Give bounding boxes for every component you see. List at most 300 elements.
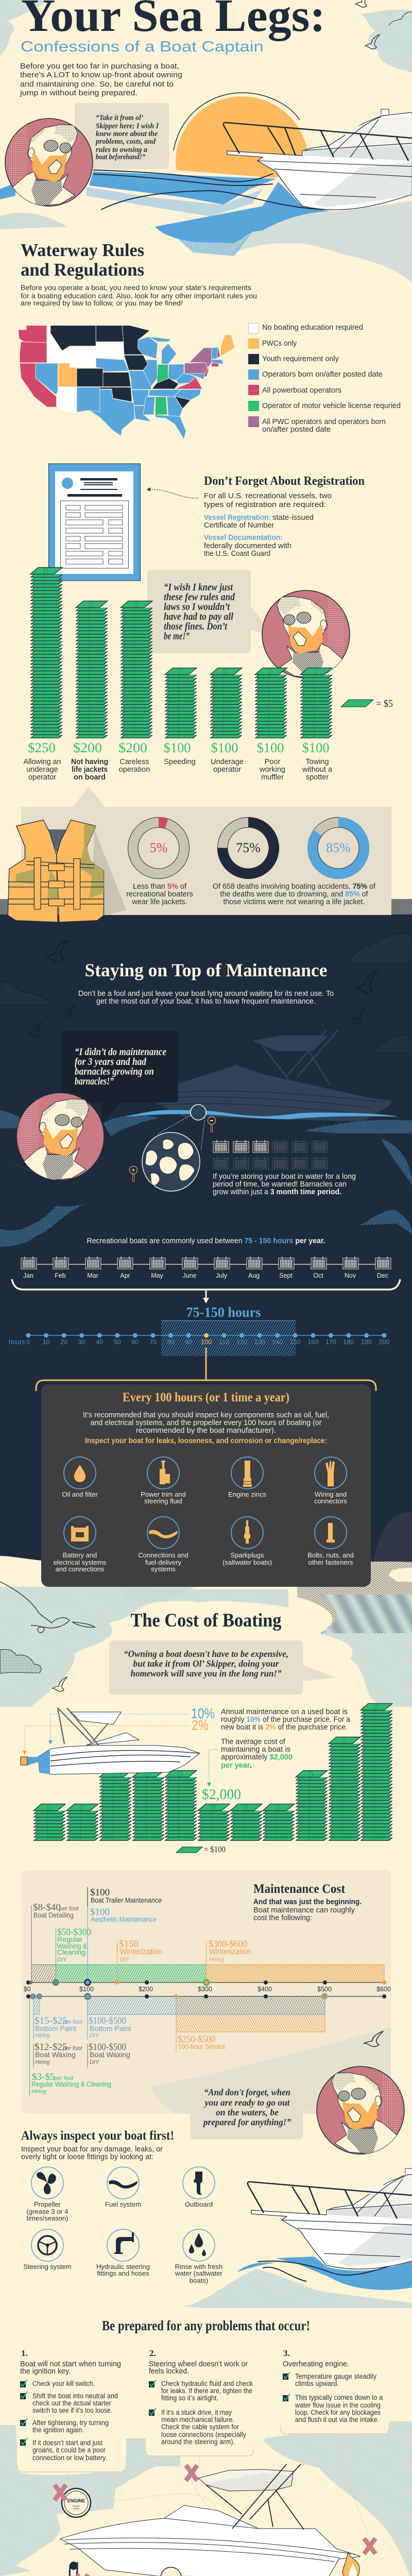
donut captions: Less than 5% of — [133, 883, 187, 891]
prepared quote: prepared for anything!” — [202, 2117, 291, 2127]
problem 3 — [281, 2348, 389, 2434]
barnacle quote: “I didn’t do maintenance — [75, 1046, 166, 1058]
inspection labels: Bolts, nuts, and — [307, 1551, 354, 1559]
donut: 75 percent — [217, 817, 279, 879]
panel: hero — [0, 0, 412, 283]
hours number line: 100 — [201, 1338, 212, 1346]
range labels above axis: Washing & — [57, 1942, 88, 1950]
fine amounts: $100 — [302, 740, 330, 755]
problem 2: 2. — [149, 2348, 156, 2358]
maintenance cost text: cost the following: — [253, 1914, 312, 1922]
range labels above axis: Winterization — [120, 1947, 162, 1956]
skipper portrait mirrored — [262, 590, 350, 678]
range labels above axis: Hiring — [209, 1957, 225, 1963]
hours number line: hours: — [9, 1338, 27, 1346]
range labels above axis: Aesthetic Maintenance — [91, 1915, 157, 1923]
inspection labels: Wiring and — [315, 1490, 347, 1498]
cost quote: homework will save you in the long run!” — [131, 1668, 281, 1679]
donut: 75 percent: 75% — [236, 840, 261, 855]
problem 2: for leaks. If there are, tighten the — [161, 2387, 252, 2395]
map legend: All PWC operators and operators born — [262, 418, 386, 426]
2000 dollars figure: $2,000 — [202, 1786, 241, 1803]
range labels above axis: $100 — [90, 1887, 110, 1898]
range labels above axis: DIY — [57, 1957, 67, 1963]
percent figures: 10% — [191, 1705, 215, 1721]
percent figures — [191, 1705, 215, 1733]
fine labels: on board — [74, 773, 106, 782]
quote text: boat beforehand!” — [96, 153, 146, 161]
heading: cost of boating: The Cost of Boating — [131, 1610, 282, 1631]
white boat — [21, 1708, 200, 1774]
fines speech bubble — [147, 570, 274, 653]
fines quote: laws so I wouldn’t — [164, 601, 230, 613]
problem 2: Check the cable system for — [161, 2423, 239, 2431]
hours number line: 190 — [361, 1338, 372, 1346]
inspection icon labels: Rinse with fresh — [175, 2263, 222, 2270]
fine labels: spotter — [306, 773, 329, 782]
fine amounts: $250 — [28, 740, 56, 755]
axis labels: $0 — [24, 1986, 31, 1993]
timeline: months — [21, 1257, 391, 1279]
donut captions: Of 658 deaths involving boating accidents, 75% of — [213, 883, 376, 891]
seagull — [53, 1677, 67, 1691]
skipper portrait mirrored — [317, 2066, 404, 2154]
problem 3: water flow issue in the cooling — [295, 2401, 381, 2409]
icon: battery — [71, 1526, 89, 1541]
problem 1: the ignition key. — [20, 2367, 71, 2376]
range labels above axis: $50-$300 — [57, 1927, 91, 1938]
prepared quote: on the waters, be — [216, 2107, 279, 2117]
timeline: months: Apr — [120, 1272, 130, 1279]
range labels above axis: Regular — [57, 1935, 82, 1943]
range labels below axis: Hiring — [35, 2059, 50, 2065]
donut captions: the deaths were due to drowning, and 85% of — [220, 890, 368, 899]
line-art boat — [60, 2464, 360, 2576]
inspection icons — [64, 1457, 347, 1549]
maintenance intro — [78, 990, 334, 1006]
fine labels: Underage — [211, 758, 244, 766]
barnacle text: grow within just a 3 month time period. — [213, 1188, 341, 1196]
night waves hatch — [0, 1110, 412, 1247]
problem 3: loop. Check for any blockages — [295, 2409, 381, 2416]
lobe hatch — [170, 232, 252, 256]
rules text: are required by law to follow, or you may be fined! — [21, 299, 183, 307]
hours number line: 90 — [185, 1338, 192, 1346]
registration text: Vessel Registration: — [204, 514, 271, 522]
donut: 5 percent — [128, 817, 190, 879]
heading: maintenance: Staying on Top of Maintenance — [84, 960, 328, 980]
fine labels: Allowing an — [24, 758, 61, 766]
problem 1: Shift the boat into neutral and — [32, 2392, 118, 2400]
engine start button — [62, 2488, 91, 2517]
blue wave band — [89, 172, 276, 205]
engine start button: START — [73, 2505, 80, 2507]
hours number line: 70 — [149, 1338, 157, 1346]
range labels below axis: Bottom Paint — [90, 2024, 131, 2032]
hours number line: 30 — [78, 1338, 85, 1346]
cost speech bubble — [109, 1640, 336, 1694]
fines quote: these few rules and — [164, 591, 235, 603]
boat inspection icons — [31, 2167, 215, 2261]
dark section background — [0, 899, 412, 1563]
usage text: Recreational boats are commonly used between 75 - 150 hours per year. — [87, 1237, 325, 1245]
blue wave lobe — [155, 182, 330, 243]
inspection icon labels: boats) — [190, 2277, 208, 2284]
problem 3: This typically comes down to a — [295, 2394, 383, 2401]
cost text: new boat it is 2% of the purchase price. — [221, 1723, 348, 1732]
waves hatch left — [0, 213, 67, 229]
fine labels: Speeding — [164, 758, 196, 766]
inspection labels: Power trim and — [141, 1490, 186, 1498]
range labels above axis: per foot — [59, 1906, 79, 1912]
maintenance intro: Don’t be a fool and just leave your boat lying around waiting for its next use. To — [78, 990, 334, 998]
heading: every 100 hours: Every 100 hours (or 1 time a year) — [123, 1391, 289, 1404]
problem 2: Check hydraulic fluid and check — [161, 2380, 253, 2387]
night gulls — [46, 940, 68, 962]
range labels below axis: DIY — [90, 2059, 99, 2065]
registration text: the U.S. Coast Guard — [204, 550, 270, 558]
range labels above axis: Winterization — [209, 1947, 251, 1956]
icon: fuel line — [149, 1530, 178, 1538]
icon: engine zinc — [243, 1461, 252, 1487]
prepared speech bubble — [191, 2078, 334, 2139]
donut captions: wear life jackets. — [131, 898, 187, 906]
hours number line: 180 — [343, 1338, 354, 1346]
range labels below axis: per foot — [62, 2019, 82, 2025]
second white boat — [248, 2168, 412, 2269]
night clouds — [0, 934, 412, 1054]
range labels below axis: Regular Washing & Cleaning — [31, 2080, 111, 2088]
hours number line: 200 — [379, 1338, 389, 1346]
donut: 85 percent — [308, 817, 369, 879]
heading: waterway rules: Waterway Rules — [21, 240, 144, 260]
heading: waterway rules — [21, 240, 144, 280]
hours number line: 60 — [131, 1338, 139, 1346]
icon: flame — [342, 2552, 359, 2576]
range labels below axis: $15-$25 — [35, 2015, 67, 2026]
heading: registration: Don’t Forget About Registration — [204, 474, 365, 488]
chart: fines money stacks — [30, 568, 332, 738]
timeline: months: Feb — [55, 1272, 66, 1279]
problem 1: Boat will not start when turning — [20, 2360, 121, 2368]
cost quote: “Owning a boat doesn't have to be expensive, — [124, 1649, 288, 1659]
problem 1: If it doesn’t start and just — [32, 2439, 102, 2447]
quote text: Skipper here; I wish I — [96, 122, 159, 130]
range labels below axis: $100-$500 — [89, 2015, 126, 2026]
dark boat — [142, 1030, 391, 1122]
light wave band — [87, 187, 263, 216]
problem x mark 2 — [186, 2465, 197, 2481]
panel: maintenance cost — [22, 1870, 391, 2114]
prepared quote — [202, 2087, 291, 2127]
hours number line: 20 — [60, 1338, 67, 1346]
inspection labels: connectors — [314, 1497, 347, 1505]
quote text: rules to owning a — [96, 146, 147, 154]
axis labels: $400 — [258, 1986, 272, 1993]
registration text — [204, 492, 332, 558]
map legend: No boating education required — [262, 324, 363, 332]
fine labels: working — [259, 766, 285, 774]
icon: steering wheel — [38, 2236, 57, 2255]
map legend — [248, 324, 401, 434]
icon: bolt — [327, 1523, 335, 1543]
intro text: jump in without being prepared. — [20, 89, 138, 97]
inspection labels: Oil and filter — [62, 1490, 98, 1498]
hours number line: 0 — [27, 1338, 30, 1346]
range labels below axis: $3-$5 — [32, 2072, 55, 2082]
problem 1: Check your kill switch. — [32, 2380, 95, 2387]
barnacle text — [213, 1173, 356, 1196]
inspection labels: Engine zincs — [228, 1490, 266, 1498]
fine labels: operator — [213, 766, 241, 774]
rules text — [21, 283, 257, 307]
registration text: types of registration are required: — [204, 501, 326, 509]
range labels below axis: Bottom Paint — [35, 2024, 76, 2032]
inspection labels: Connections and — [138, 1551, 188, 1559]
inspect text: Inspect your boat for any damage, leaks, or — [21, 2145, 163, 2154]
maintenance bubble — [62, 1031, 178, 1122]
registration text: Vessel Documentation: — [204, 534, 283, 542]
problem x mark 4 — [77, 2574, 88, 2576]
timeline: months: Jan — [23, 1272, 33, 1279]
prepared quote: “And don't forget, when — [204, 2087, 290, 2097]
inspection labels: Battery and — [63, 1551, 97, 1559]
map legend: on/after posted date — [262, 426, 331, 434]
icon: life jacket — [8, 820, 126, 922]
donut: 85 percent: 85% — [326, 840, 351, 855]
sun — [176, 96, 308, 178]
cloud line — [389, 12, 412, 26]
intro text — [20, 62, 182, 97]
problem 1: groans, it could be a poor — [32, 2446, 106, 2454]
fines quote: be me!” — [164, 631, 190, 642]
inspection labels: systems — [151, 1565, 176, 1573]
range labels above axis: $8-$40 — [33, 1902, 61, 1913]
lower sage wave — [231, 201, 412, 283]
problem 2: feels locked. — [149, 2367, 189, 2376]
donut captions: recreational boaters — [126, 890, 193, 899]
fine amounts: $100 — [211, 740, 238, 755]
problem 2: If it’s a stuck drive, it may — [161, 2409, 232, 2416]
problem 1: 1. — [21, 2348, 28, 2358]
sky hatch right — [360, 10, 412, 72]
problem 2: Steering wheel doesn’t work or — [149, 2360, 248, 2368]
icon: power trim — [160, 1461, 170, 1484]
inspection labels: fuel-delivery — [145, 1558, 182, 1566]
sky hatch left — [0, 0, 52, 56]
barnacle magnifier — [130, 1105, 215, 1191]
seagull — [365, 35, 380, 49]
cost text — [221, 1708, 351, 1770]
fines quote: have had to pay all — [164, 611, 233, 622]
every 100 hours text — [83, 1411, 329, 1445]
donut captions: those victims were not wearing a life jacket. — [224, 898, 365, 906]
problem 2: fitting so it’s airtight. — [161, 2394, 218, 2402]
range labels above axis: Boat Trailer Maintenance — [91, 1896, 162, 1904]
timeline: months: Dec — [377, 1272, 388, 1279]
cost quote: but take it from Ol’ Skipper, doing your — [133, 1658, 279, 1669]
barnacle quote: for 3 years and had — [75, 1056, 147, 1067]
maintenance cost text — [253, 1898, 362, 1922]
rules text: Before you operate a boat, you need to know your state’s requirements — [21, 283, 251, 292]
chart: maintenance ranges — [26, 1887, 386, 2095]
quote text: knew more about the — [96, 130, 158, 138]
left blue band — [0, 183, 15, 199]
range labels below axis: per foot — [54, 2075, 74, 2081]
problem 1: connection or low battery. — [32, 2454, 107, 2462]
barnacle quote: barnacles growing on — [75, 1066, 154, 1077]
inspection labels: electrical systems — [54, 1558, 107, 1566]
brace and arrow — [12, 1279, 400, 1303]
inspection icon labels: (grease 3 or 4 — [27, 2208, 68, 2215]
night gull 4 — [350, 1010, 365, 1024]
dotted callout lines — [25, 1714, 218, 1783]
quote text: “Take it from ol’ — [96, 114, 143, 122]
inspection icon labels — [23, 2200, 223, 2284]
seagull top — [355, 0, 370, 7]
night gull 5 — [28, 1023, 43, 1037]
map legend: Operator of motor vehicle license requried — [262, 402, 401, 410]
problem 1: the ignition again. — [32, 2426, 84, 2434]
prepared quote: you are ready to go out — [204, 2097, 290, 2108]
fines quote — [164, 582, 235, 642]
fines quote: “I wish I knew just — [164, 582, 233, 593]
axis labels: $300 — [198, 1986, 212, 1993]
problem 2: mean mechanical failure. — [161, 2416, 234, 2424]
legend: note equals 100 dollars — [176, 1844, 226, 1854]
fine labels: Not having — [71, 758, 108, 766]
hatch behind problem section — [0, 2421, 412, 2576]
barnacle text: If you’re storing your boat in water for a long — [213, 1173, 356, 1181]
every 100 hours text: It’s recommended that you should inspect key components such as oil, fuel, — [83, 1411, 329, 1419]
range labels below axis: Boat Waxing — [90, 2050, 130, 2059]
night gull 2 — [355, 971, 377, 993]
timeline: months: Mar — [87, 1272, 98, 1279]
range labels above axis: Cleaning — [57, 1948, 85, 1956]
heading: waterway rules: and Regulations — [21, 260, 144, 280]
cost text: approximately $2,000 — [221, 1753, 293, 1761]
timeline: months: Aug — [248, 1272, 260, 1279]
fine labels: Poor — [265, 758, 280, 766]
range labels below axis: $250-$500 — [178, 2034, 215, 2045]
sun arc — [174, 93, 300, 150]
donut: 5 percent: 5% — [150, 840, 167, 855]
range labels above axis: $100 — [90, 1907, 110, 1918]
range labels below axis: Boat Waxing — [35, 2050, 76, 2059]
engine start button: ENGINE — [67, 2498, 85, 2503]
icon: oil drop — [74, 1465, 85, 1482]
range labels below axis: DIY — [90, 2032, 99, 2039]
hours number line: 150 — [290, 1338, 301, 1346]
cost text: maintaining a boat is — [221, 1745, 290, 1754]
hours number line: 140 — [272, 1338, 283, 1346]
fine labels: Towing — [305, 758, 329, 766]
inspection icon labels: Outboard — [185, 2200, 213, 2208]
problem 1 — [17, 2348, 126, 2472]
cost text: The average cost of — [221, 1738, 286, 1746]
fine amounts: $200 — [118, 740, 147, 755]
range labels below axis: Hiring — [31, 2089, 47, 2095]
problem 1: check out the actual starter — [32, 2399, 111, 2407]
waves under second boat — [184, 2257, 412, 2308]
registration text: state-issued — [272, 514, 314, 522]
rules text: for a boating education card. Also, look for any other important rules you — [21, 292, 257, 300]
fine labels: muffler — [261, 773, 284, 782]
fine labels: operation — [119, 766, 150, 774]
icon: spark plug — [244, 1520, 250, 1544]
percent figures: 2% — [192, 1717, 209, 1733]
problem x mark 1 — [55, 2485, 66, 2500]
skipper portrait night — [16, 1093, 104, 1180]
dotted connectors — [67, 2434, 370, 2576]
range labels below axis: $100-$500 — [89, 2042, 126, 2053]
problem 1: After tightening, try turning — [32, 2419, 109, 2427]
registration text: Certificate of Number — [204, 521, 274, 530]
icon: outboard — [194, 2172, 202, 2195]
inspection icon labels: Hydraulic steering — [96, 2263, 150, 2270]
hours number line: 10 — [43, 1338, 50, 1346]
inspection icon labels: times/season) — [27, 2214, 68, 2222]
calendars: three months of growth — [213, 1140, 328, 1169]
icon: propeller — [37, 2172, 56, 2194]
range labels below axis: $12-$25 — [35, 2042, 67, 2053]
registration text: federally documented with — [204, 542, 291, 550]
donut captions — [126, 883, 376, 906]
heading: be prepared: Be prepared for any problems that occur! — [102, 2318, 310, 2333]
fine labels — [24, 758, 333, 782]
night gull 3 — [62, 1005, 76, 1019]
range labels below axis — [31, 2015, 226, 2095]
range labels above axis: Boat Detailing — [33, 1911, 74, 1919]
chart: annual cost money stacks — [33, 1703, 392, 1841]
engine start button: STOP — [73, 2507, 79, 2510]
range labels above axis: $300-$600 — [209, 1939, 247, 1950]
inspection icon labels: fittings and hoses — [97, 2269, 149, 2277]
timeline: months: July — [216, 1272, 228, 1279]
fine labels: life jackets — [72, 766, 108, 774]
icon: water drops — [189, 2233, 206, 2256]
inspection icon labels: Steering system — [23, 2263, 72, 2270]
inspection labels: (saltwater boats) — [222, 1558, 272, 1566]
inspection labels: steering fluid — [144, 1497, 182, 1505]
timeline: months: May — [151, 1272, 164, 1279]
maintenance cost text: Boat maintenance can roughly — [253, 1906, 355, 1914]
problem 2 — [146, 2348, 253, 2456]
hours number line: 130 — [254, 1338, 265, 1346]
hours number line — [9, 1320, 389, 1356]
timeline: months: Sept — [279, 1272, 293, 1279]
cream sky at bottom of dark section — [0, 1512, 412, 1707]
problem 3: climbs upward. — [295, 2380, 339, 2387]
hours number line: 110 — [219, 1338, 229, 1346]
inspection icon labels: Propeller — [34, 2200, 61, 2208]
every 100 hours text: Inspect your boat for leaks, looseness, and corrosion or change/replace: — [85, 1437, 327, 1445]
icon: hydraulic elbow — [114, 2232, 134, 2254]
inspect text — [21, 2145, 163, 2161]
range labels below axis: Hiring — [35, 2032, 50, 2039]
axis labels: $200 — [139, 1986, 153, 1993]
hours number line: 120 — [236, 1338, 247, 1346]
legend: note equals 5 dollars: = $5 — [376, 698, 393, 709]
problem 3: Temperature gauge steadily — [295, 2372, 376, 2380]
axis labels: $100 — [79, 1986, 94, 1993]
quote text — [95, 114, 159, 161]
fines quote: those fines. Don’t — [164, 621, 228, 632]
icon: drive belt — [63, 2562, 78, 2576]
axis labels — [24, 1986, 391, 1993]
icon: fuel line — [109, 2180, 138, 2189]
range labels below axis: per foot — [62, 2045, 82, 2052]
